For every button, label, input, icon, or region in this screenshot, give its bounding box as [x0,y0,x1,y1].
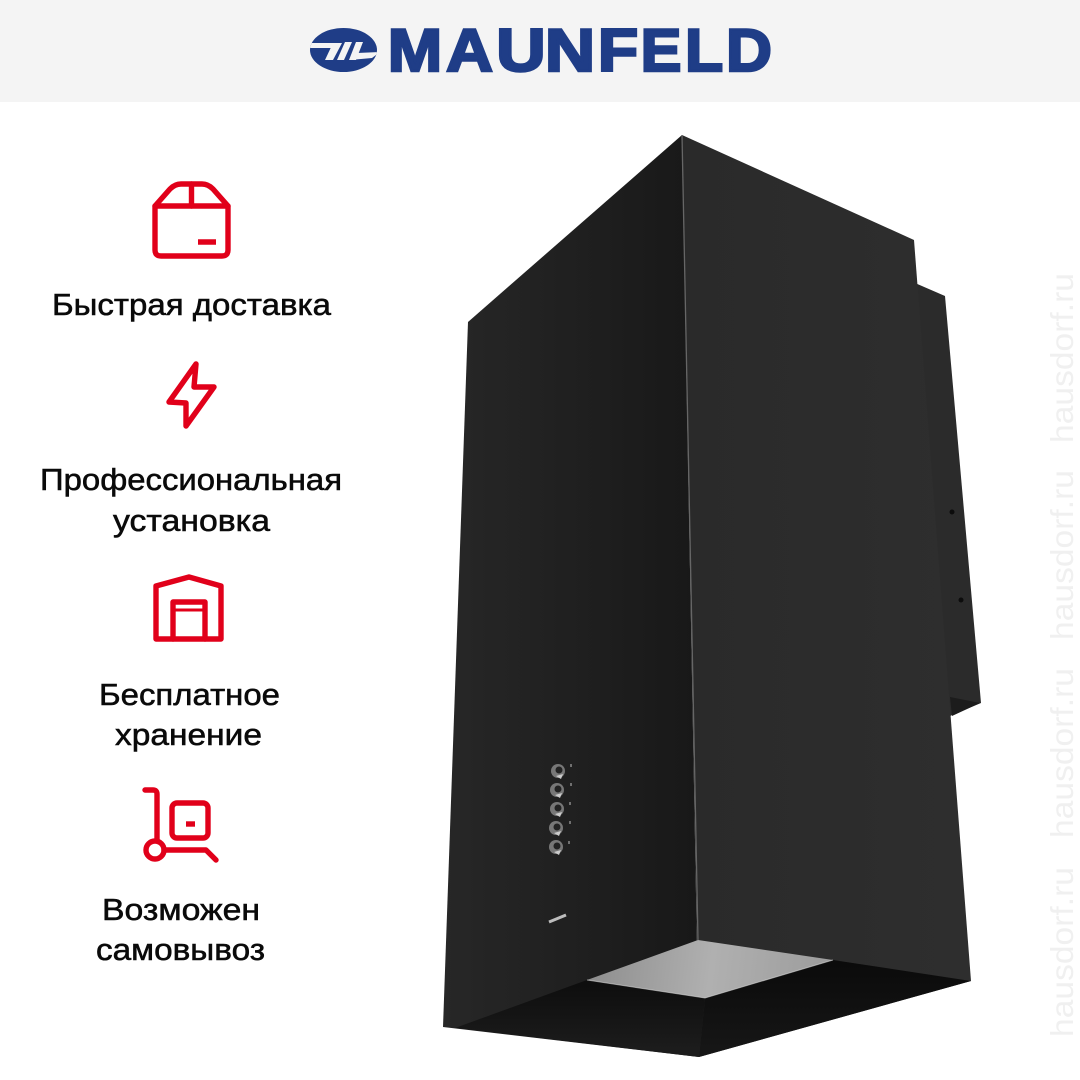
logo wordmark: D [726,18,772,85]
watermark: hausdorf.ru: hausdorf.ru [1044,273,1080,443]
icon: warehouse [156,577,221,639]
label: free storage [99,677,280,752]
label: free storage: хранение [115,717,262,752]
label: self pickup: Возможен [102,892,260,927]
logo emblem [306,28,380,72]
feature: self pickup [96,790,265,967]
logo wordmark: N [545,17,595,84]
label: professional installation [40,462,342,538]
feature: professional installation [40,364,342,538]
watermark: hausdorf.ru [1044,273,1080,1037]
hood lower rim [455,960,971,1057]
logo wordmark [388,17,772,85]
logo wordmark: F [598,18,638,84]
feature: free storage [99,577,280,752]
logo wordmark: A [446,17,493,84]
label: professional installation: Профессиональная [40,462,342,497]
hood left face [443,135,699,1057]
icon: hand truck [145,790,216,860]
hood corner highlight [682,135,698,940]
label: professional installation: установка [113,503,271,538]
brand logo [310,28,771,73]
label: free storage: Бесплатное [99,677,280,712]
icon: lightning bolt [169,364,214,426]
hood brand mark [549,915,566,922]
logo wordmark: M [388,17,442,84]
label: self pickup: самовывоз [96,932,265,967]
logo wordmark: E [641,17,681,84]
hood wall mount [915,283,981,716]
watermark: hausdorf.ru: hausdorf.ru [1044,470,1080,640]
hood grease filter [587,940,833,998]
feature: fast delivery [52,184,332,322]
watermark: hausdorf.ru: hausdorf.ru [1044,668,1080,838]
logo wordmark: L [685,17,723,84]
icon: parcel box [155,184,228,256]
header band [0,0,1080,102]
hood right face [682,135,971,1057]
watermark: hausdorf.ru: hausdorf.ru [1044,867,1080,1037]
logo wordmark: U [496,17,546,84]
hood control buttons [549,764,571,855]
label: self pickup [96,892,265,967]
product: range hood [443,135,981,1057]
label: fast delivery: Быстрая доставка [52,287,332,322]
